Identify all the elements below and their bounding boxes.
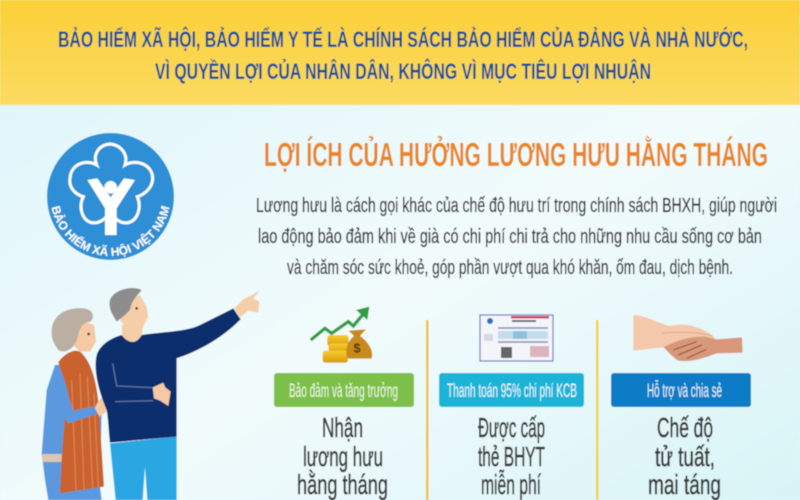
woman [42, 308, 115, 500]
label box: blue [611, 373, 751, 407]
label box: green: Bảo đảm và tăng trưởng [289, 381, 398, 402]
label box: cyan [439, 373, 584, 407]
benefit text [478, 412, 545, 500]
icon: health insurance card [480, 315, 553, 361]
benefit text: hằng tháng [297, 469, 388, 500]
logo: Bảo hiểm xã hội Việt Nam [46, 132, 174, 260]
logo text: BẢO HIỂM XÃ HỘI VIỆT NAM [50, 205, 170, 258]
benefit text: Được cấp [478, 412, 545, 443]
benefit text: tử tuất, [655, 441, 715, 472]
benefit text [648, 412, 721, 500]
column: pension [274, 307, 414, 500]
illustration: elderly couple [42, 288, 260, 500]
man [96, 288, 260, 500]
icon: holding hands [633, 315, 743, 361]
header text [58, 27, 748, 84]
label box: blue: Hỗ trợ và chia sẻ [647, 380, 722, 402]
benefit text: Chế độ [657, 412, 713, 443]
icon: growth arrow and money [311, 307, 372, 363]
logo flower [70, 144, 153, 223]
logo figure [87, 178, 135, 235]
column: support [611, 315, 751, 500]
benefit text [297, 412, 388, 500]
benefit text: thẻ BHYT [478, 441, 545, 472]
header banner [0, 0, 800, 105]
benefit text: Nhận [322, 412, 363, 443]
benefit text: mai táng [648, 469, 721, 500]
divider [596, 320, 598, 500]
benefit text: miễn phí [481, 469, 541, 500]
column: health card [439, 315, 584, 500]
divider [426, 320, 428, 500]
label box: cyan: Thanh toán 95% chi phí KCB [447, 381, 577, 402]
intro paragraph [256, 195, 777, 279]
benefit text: lương hưu [303, 441, 383, 472]
icon: growth arrow and money: $ [353, 342, 361, 356]
label box: green [274, 373, 414, 407]
